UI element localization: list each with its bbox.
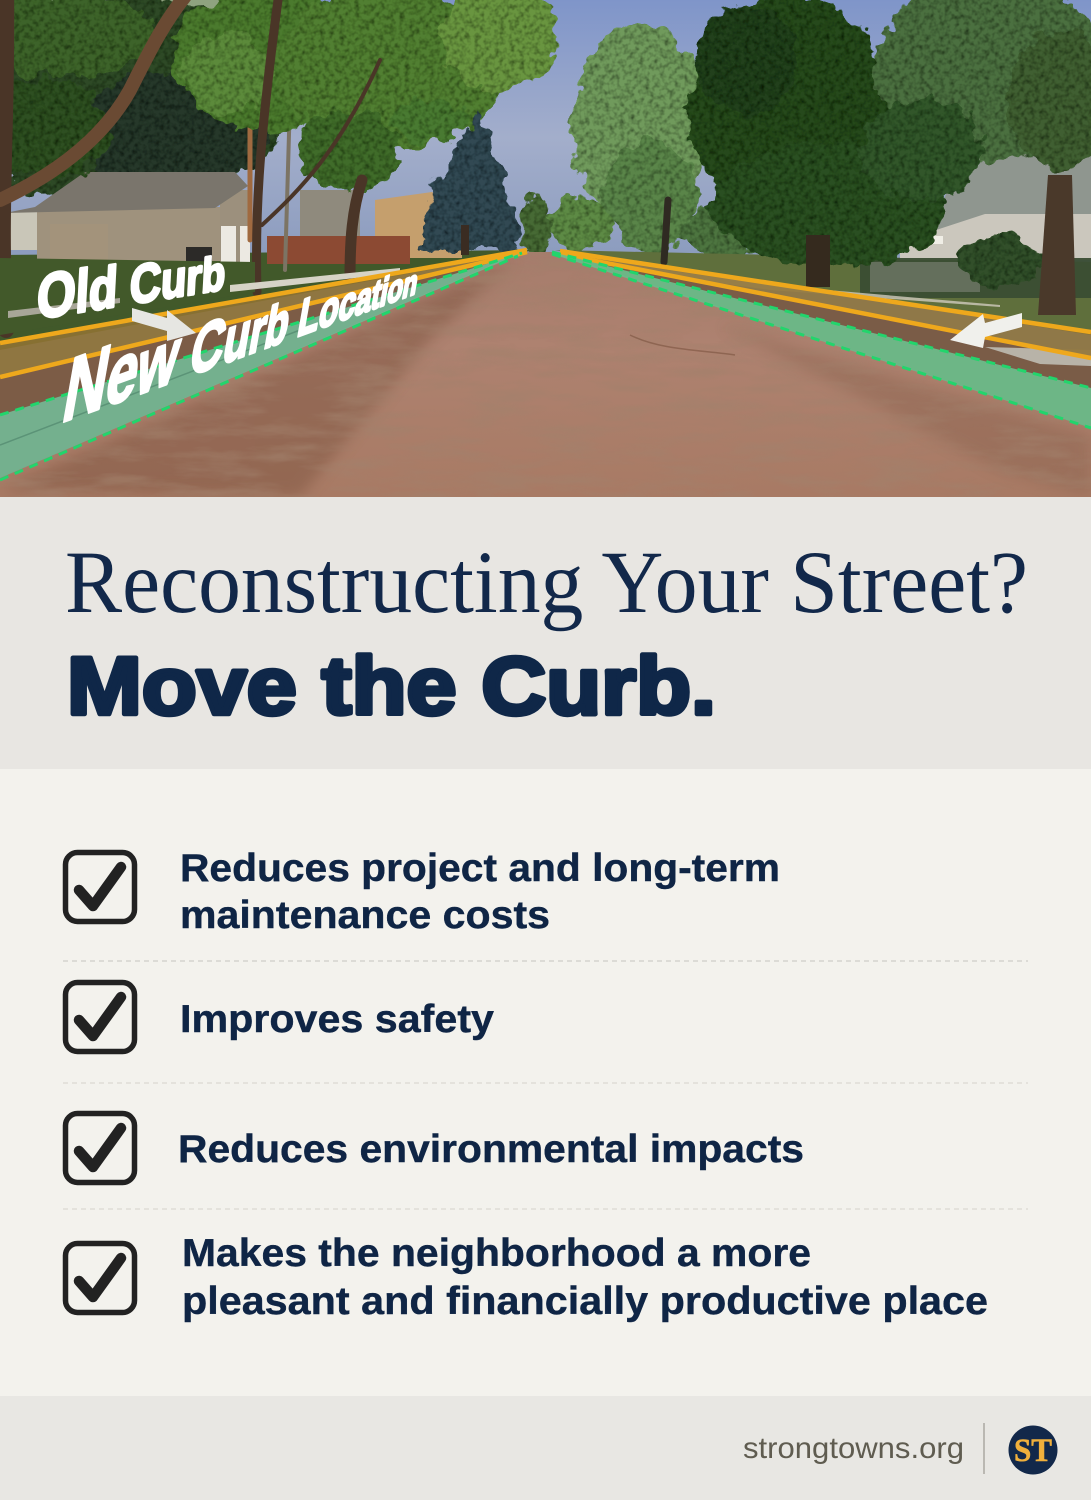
buildings left: garage, tan building, grey house	[0, 172, 462, 263]
icon: checkbox	[66, 1244, 134, 1312]
item: improves safety	[66, 982, 494, 1052]
logo: ST badge: ST	[1014, 1433, 1052, 1469]
item text: Reduces project and long-term	[180, 847, 780, 890]
right house	[860, 150, 1091, 298]
icon: checkbox	[66, 1114, 134, 1182]
icon: checkbox	[66, 852, 134, 922]
item: pleasant and productive	[66, 1232, 988, 1323]
lawn and sidewalks	[0, 258, 255, 335]
background dark trees	[0, 0, 760, 258]
old curb zone left (orange)	[0, 250, 527, 377]
arrow: right, pointing to new curb	[950, 313, 1022, 348]
foreground foliage	[0, 0, 1091, 288]
item text: pleasant and financially productive place	[182, 1280, 988, 1323]
new curb zone left (green)	[0, 253, 522, 480]
item: environmental impacts	[66, 1114, 804, 1182]
new curb zone right (green)	[552, 252, 1091, 428]
dirt verge	[0, 250, 535, 478]
label: Old Curb: Old Curb	[35, 233, 227, 333]
title line two: Move the Curb.	[67, 641, 716, 732]
ground left and right	[0, 250, 535, 350]
background tree trunks	[248, 128, 672, 272]
checklist panel	[63, 847, 1028, 1323]
item text: Makes the neighborhood a more	[182, 1232, 811, 1275]
icon: checkbox	[66, 982, 134, 1052]
label: New Curb Location: New Curb Location	[57, 211, 430, 443]
street photo with curb annotations	[0, 0, 1091, 497]
red wooden fence	[267, 236, 410, 264]
footer	[0, 1396, 1091, 1500]
item: reduces costs	[66, 847, 780, 937]
title line one: Reconstructing Your Street?	[65, 534, 1028, 632]
title panel	[0, 497, 1091, 769]
website url: strongtowns.org	[743, 1432, 964, 1465]
foreground tree trunks and limbs	[0, 0, 380, 330]
old curb zone right (orange)	[560, 250, 1091, 358]
item text: Reduces environmental impacts	[178, 1128, 804, 1171]
item text: Improves safety	[180, 998, 494, 1041]
arrow: left, pointing to new curb	[132, 308, 196, 341]
logo: ST badge	[1008, 1426, 1058, 1474]
item text: maintenance costs	[180, 894, 550, 937]
blue spruce	[422, 112, 520, 252]
road surface	[0, 252, 1091, 497]
